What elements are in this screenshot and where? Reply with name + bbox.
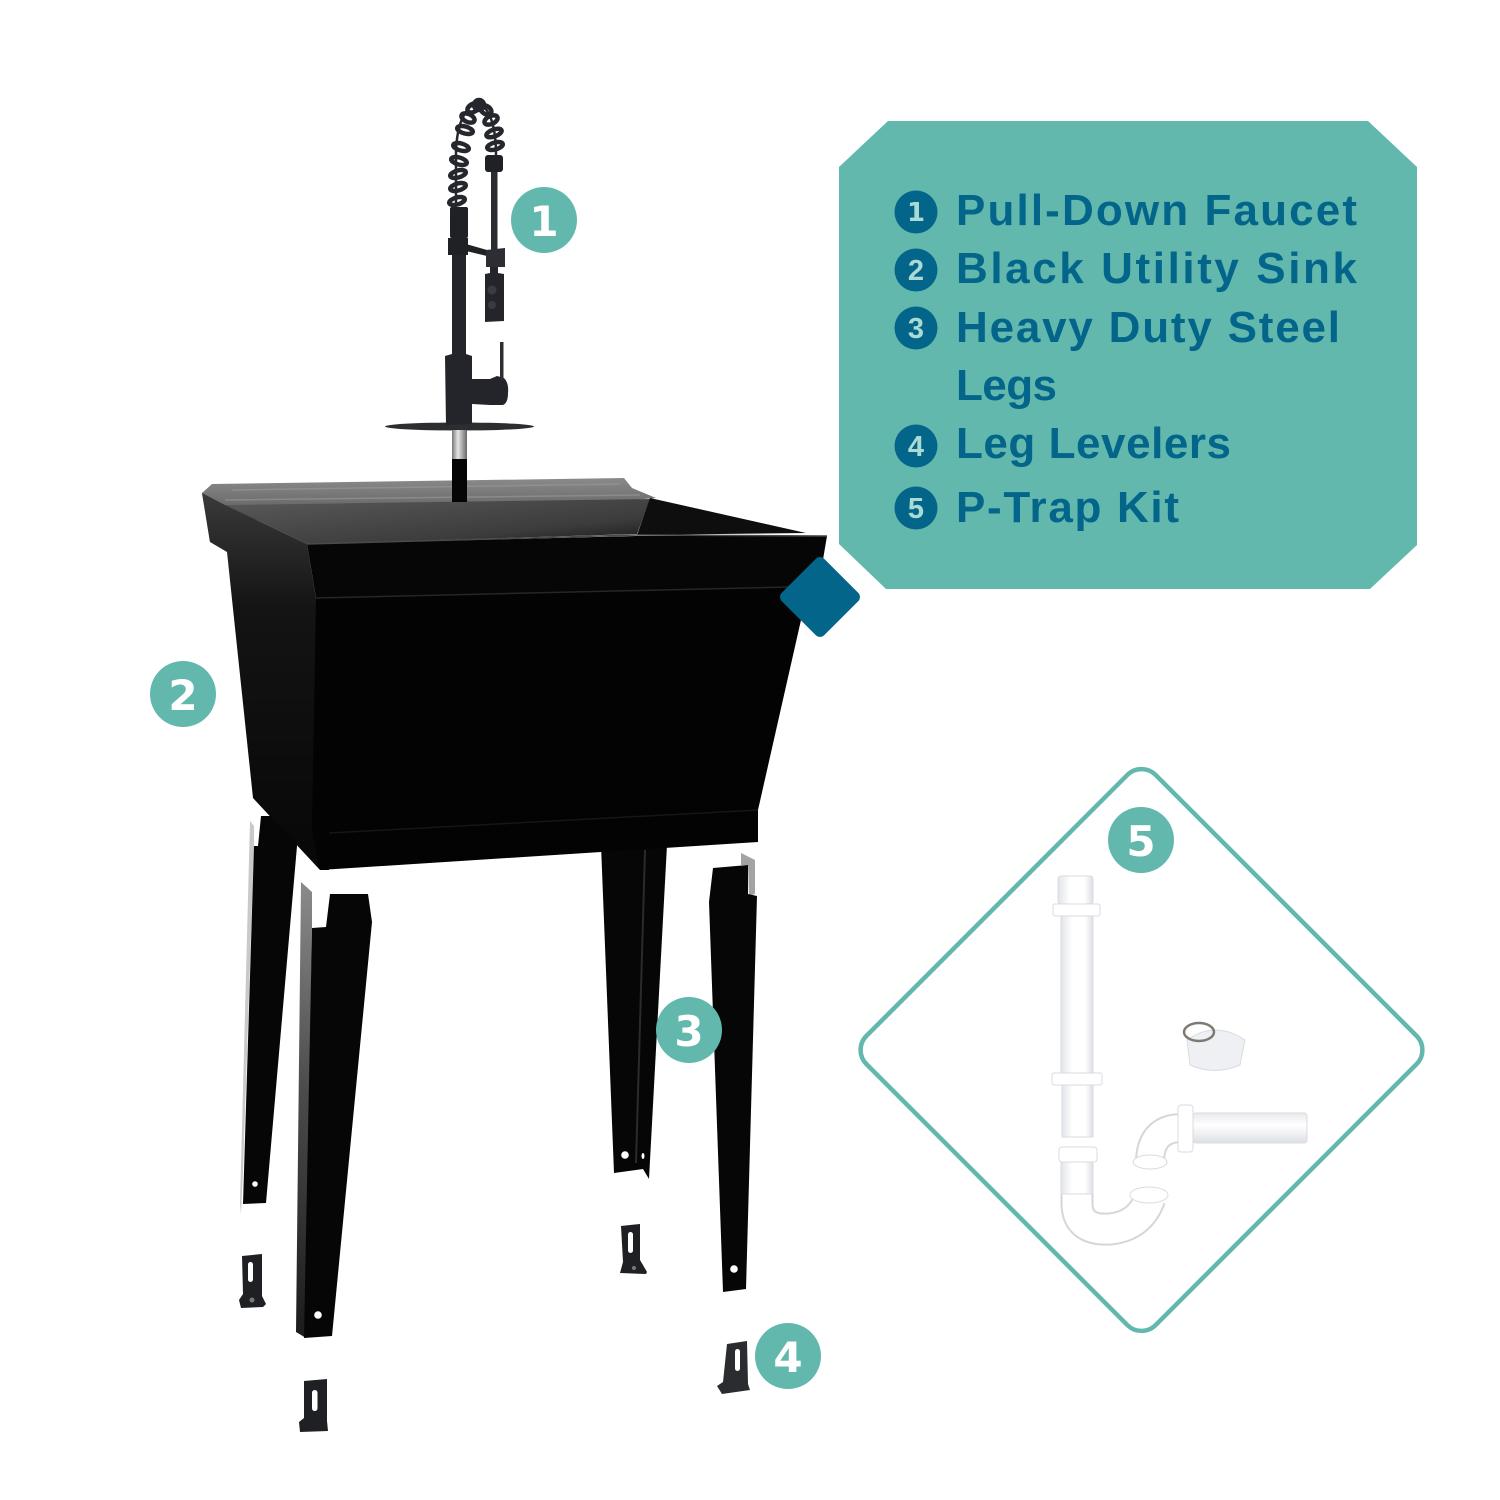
p-trap kit parts: [1052, 876, 1307, 1229]
rubber stopper with ring: [1184, 1023, 1245, 1070]
number badge 3: 3: [674, 1007, 704, 1056]
faucet: [385, 100, 534, 502]
sink basin right wall: [637, 498, 806, 535]
number badge 2: 2: [168, 671, 198, 720]
p-trap diamond frame: [852, 761, 1431, 1339]
faucet hose ribs: [485, 155, 503, 172]
feature list panel: [839, 121, 1417, 589]
list item 1: 1: [907, 198, 925, 228]
sink front band: [307, 536, 827, 598]
list item 3: 3: [908, 313, 924, 345]
leveler 3: [620, 1224, 647, 1274]
list item 3: Legs: [956, 361, 1057, 410]
faucet black shank: [452, 459, 467, 502]
tailpiece pipe: [1052, 876, 1102, 1137]
number badge 4: [755, 1323, 821, 1389]
leveler 2: [299, 1379, 328, 1432]
sink basin back wall: [225, 499, 650, 544]
faucet holder clip: [486, 248, 505, 267]
sink front body: [312, 587, 801, 870]
blue diamond accent: [778, 555, 862, 639]
faucet spring coil: [448, 100, 504, 206]
faucet silver shank: [452, 430, 467, 459]
leg front right: [709, 853, 757, 1292]
panel background: [839, 121, 1417, 589]
elbow with outlet pipe: [1133, 1105, 1307, 1169]
faucet lever: [500, 342, 504, 380]
leg back right: [601, 845, 667, 1179]
number badge 5: 5: [1126, 817, 1156, 866]
list item 3: [894, 303, 1340, 410]
number badge 1: [511, 187, 577, 253]
list item 3: Heavy Duty Steel: [956, 303, 1340, 352]
sink lower band line: [329, 810, 758, 833]
leg back left: [240, 816, 297, 1214]
faucet hose: [491, 172, 498, 250]
number badge 5: [1108, 807, 1174, 873]
number badge 2: [150, 661, 216, 727]
faucet ribbed collar: [448, 207, 487, 256]
sink rim back ledge: [202, 478, 656, 542]
faucet body and stem: [445, 253, 508, 425]
sink left side face: [202, 493, 329, 870]
list item 1: Pull-Down Faucet: [956, 186, 1357, 235]
sink band crease: [316, 587, 788, 598]
number badge 1: 1: [529, 197, 559, 246]
leveler 1: [239, 1254, 266, 1308]
legs: [240, 816, 757, 1338]
number badge 4: 4: [773, 1333, 803, 1382]
list item 4: 4: [908, 431, 924, 463]
sink: [202, 478, 827, 870]
faucet spray head: [485, 267, 504, 322]
list item 2: 2: [908, 255, 924, 287]
j-bend trap: [1059, 1147, 1168, 1229]
list item 2: Black Utility Sink: [956, 244, 1358, 293]
sink rim streak: [225, 484, 640, 500]
list item 4: Leg Levelers: [956, 419, 1231, 468]
leveler 4: [717, 1341, 750, 1394]
leg levelers: [239, 1224, 750, 1432]
number badge 3: [656, 997, 722, 1063]
leg front left: [296, 882, 372, 1338]
list item 5: 5: [908, 493, 924, 525]
sink top edge highlight: [307, 535, 827, 544]
faucet deck plate: [385, 422, 534, 430]
list item 5: P-Trap Kit: [956, 483, 1179, 532]
